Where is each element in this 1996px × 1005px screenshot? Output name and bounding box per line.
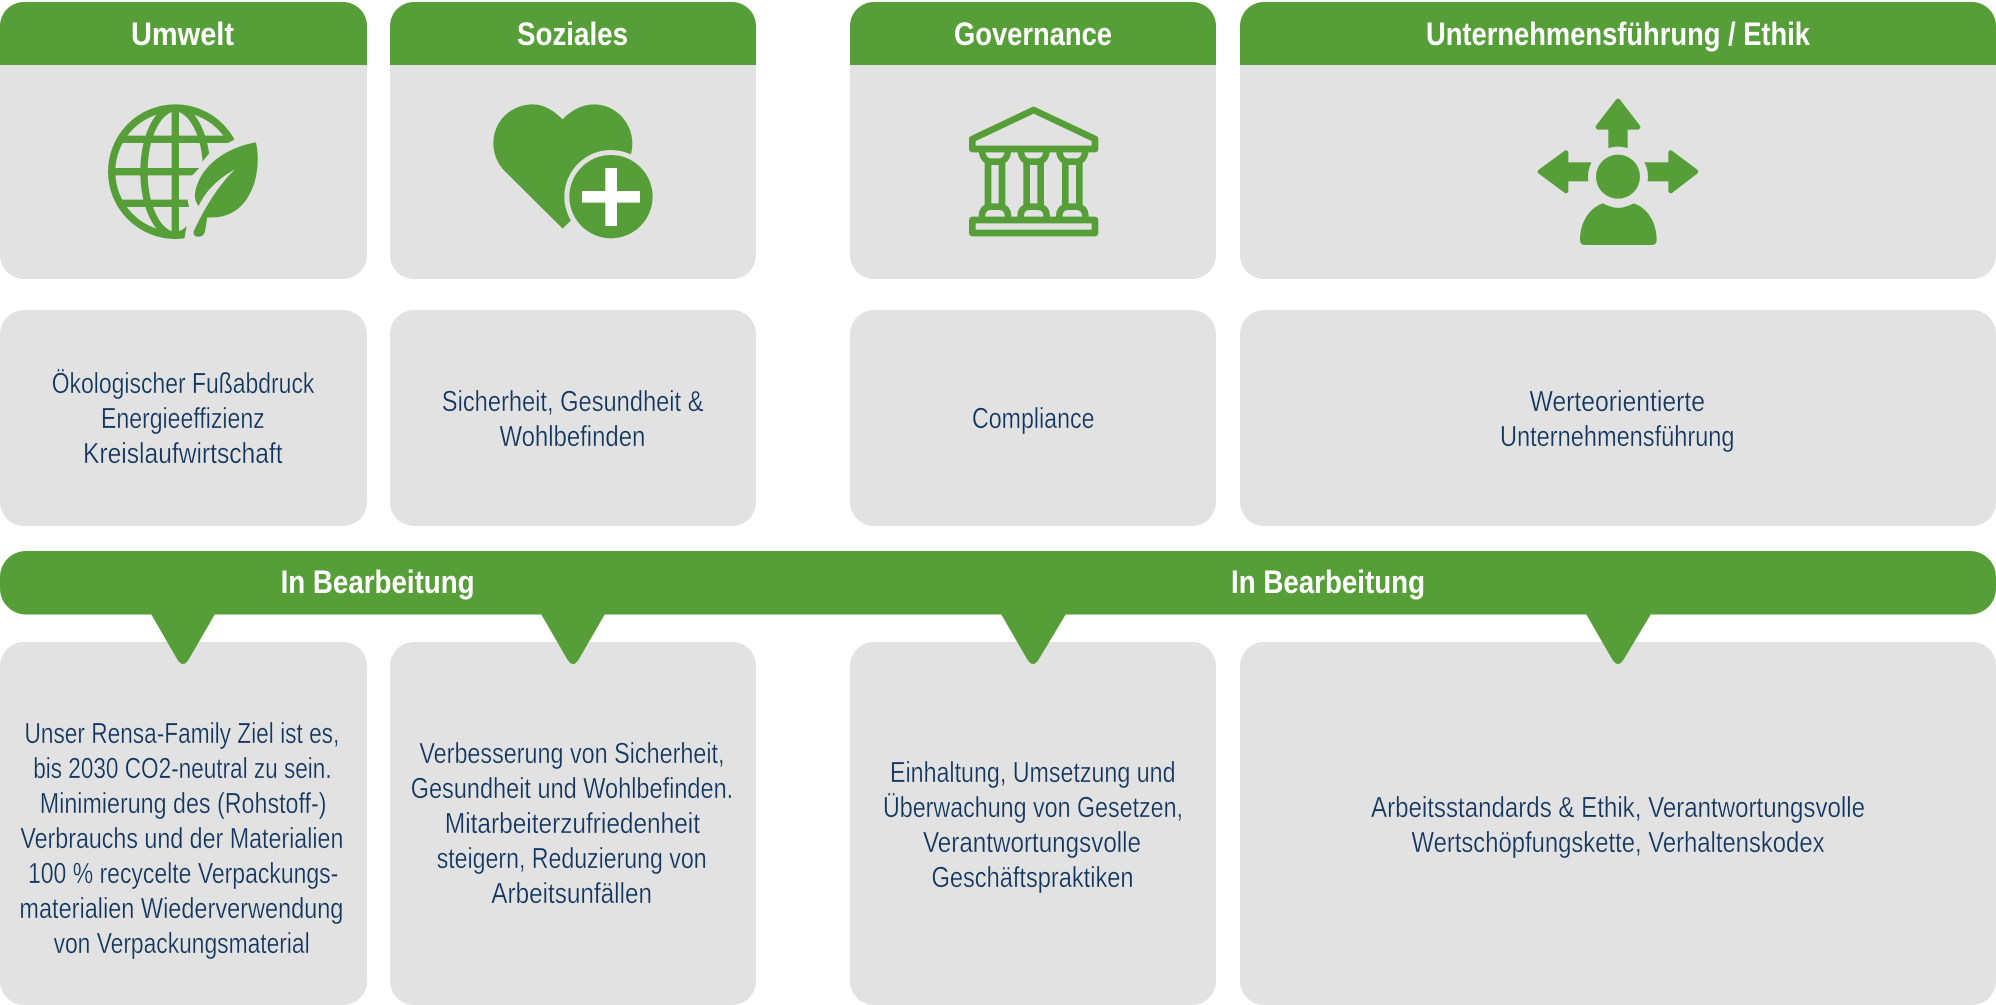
text: Umwelt details: Minimierung des (Rohstoff-) [40,788,327,820]
text: Unternehmensführung details [1371,792,1865,859]
panel: topics Unternehmensführung [1240,310,1996,526]
text: Soziales details: Arbeitsunfällen [491,878,652,910]
heading: Soziales: Soziales [517,16,628,52]
text: Governance details: Verantwortungsvolle [923,827,1141,859]
pointer: Unternehmensführung [1586,614,1651,664]
icon: temple with columns [972,110,1095,233]
pointer: Governance [1001,614,1066,664]
text: Soziales topics [442,386,704,453]
panel: topics Umwelt [0,310,367,526]
text: Unternehmensführung details: Arbeitsstandards & Ethik, Verantwortungsvolle [1371,792,1865,824]
label: In Bearbeitung left: In Bearbeitung [281,564,475,600]
text: Umwelt details: Unser Rensa-Family Ziel ist es, [24,718,339,750]
text: Umwelt topics: Energieeffizienz [101,403,265,435]
text: Umwelt details: bis 2030 CO2-neutral zu sein. [33,753,332,785]
panel: topics Governance [850,310,1216,526]
text: Governance details: Geschäftspraktiken [932,862,1134,894]
panel: Governance header card [850,2,1216,279]
text: Governance details: Überwachung von Gesetzen, [883,792,1183,824]
label: In Bearbeitung right: In Bearbeitung [1231,564,1425,600]
panel: Umwelt header card [0,2,367,279]
text: Soziales details: Verbesserung von Sicherheit, [419,738,724,770]
text: Umwelt topics: Kreislaufwirtschaft [83,438,283,470]
text: Unternehmensführung topics: Werteorientierte [1530,386,1705,418]
panel: Unternehmensführung / Ethik header card [1240,2,1996,279]
panel: detail Umwelt [0,642,367,1005]
text: Umwelt details: Verbrauchs und der Materialien [20,823,343,855]
heading: Umwelt: Umwelt [131,16,234,52]
text: Unternehmensführung topics: Unternehmensführung [1500,421,1734,453]
text: Umwelt details: von Verpackungsmaterial [54,928,310,960]
text: Umwelt topics [52,368,315,470]
banner: In Bearbeitung with four pointers [0,551,1996,664]
text: Governance details [883,757,1183,894]
text: Unternehmensführung details: Wertschöpfungskette, Verhaltenskodex [1412,827,1825,859]
panel: topics Soziales [390,310,756,526]
text: Soziales details: steigern, Reduzierung von [437,843,707,875]
text: Umwelt details: materialien Wiederverwendung [19,893,343,925]
icon: globe with leaf [112,108,290,263]
text: Soziales details: Mitarbeiterzufriedenheit [445,808,700,840]
text: Soziales details: Gesundheit und Wohlbefinden. [411,773,733,805]
heading: Governance: Governance [954,16,1112,52]
text: Soziales topics: Sicherheit, Gesundheit & [442,386,704,418]
text: Umwelt topics: Ökologischer Fußabdruck [52,368,315,400]
text: Soziales topics: Wohlbefinden [500,421,645,453]
header bar: Governance [850,2,1216,65]
heading: Unternehmensführung / Ethik: Unternehmensführung / Ethik [1426,16,1810,52]
pointer: Umwelt [151,614,215,664]
panel: detail Governance [850,642,1216,1005]
text: Governance details: Einhaltung, Umsetzung und [890,757,1176,789]
header bar: Soziales [390,2,756,65]
text: Umwelt details: 100 % recycelte Verpackungs- [28,858,338,890]
pointer: Soziales [541,614,605,664]
text: Unternehmensführung topics [1500,386,1734,453]
text: Compliance: Compliance [972,403,1094,435]
header bar: Unternehmensführung / Ethik [1240,2,1996,65]
panel: detail Soziales [390,642,756,1005]
header bar: Umwelt [0,2,367,65]
panel: detail Unternehmensführung [1240,642,1996,1005]
icon: heart with plus [493,104,658,243]
text: Soziales details [411,738,733,910]
icon: person with arrows [1540,101,1696,245]
panel: Soziales header card [390,2,756,279]
text: Umwelt details [19,718,343,960]
